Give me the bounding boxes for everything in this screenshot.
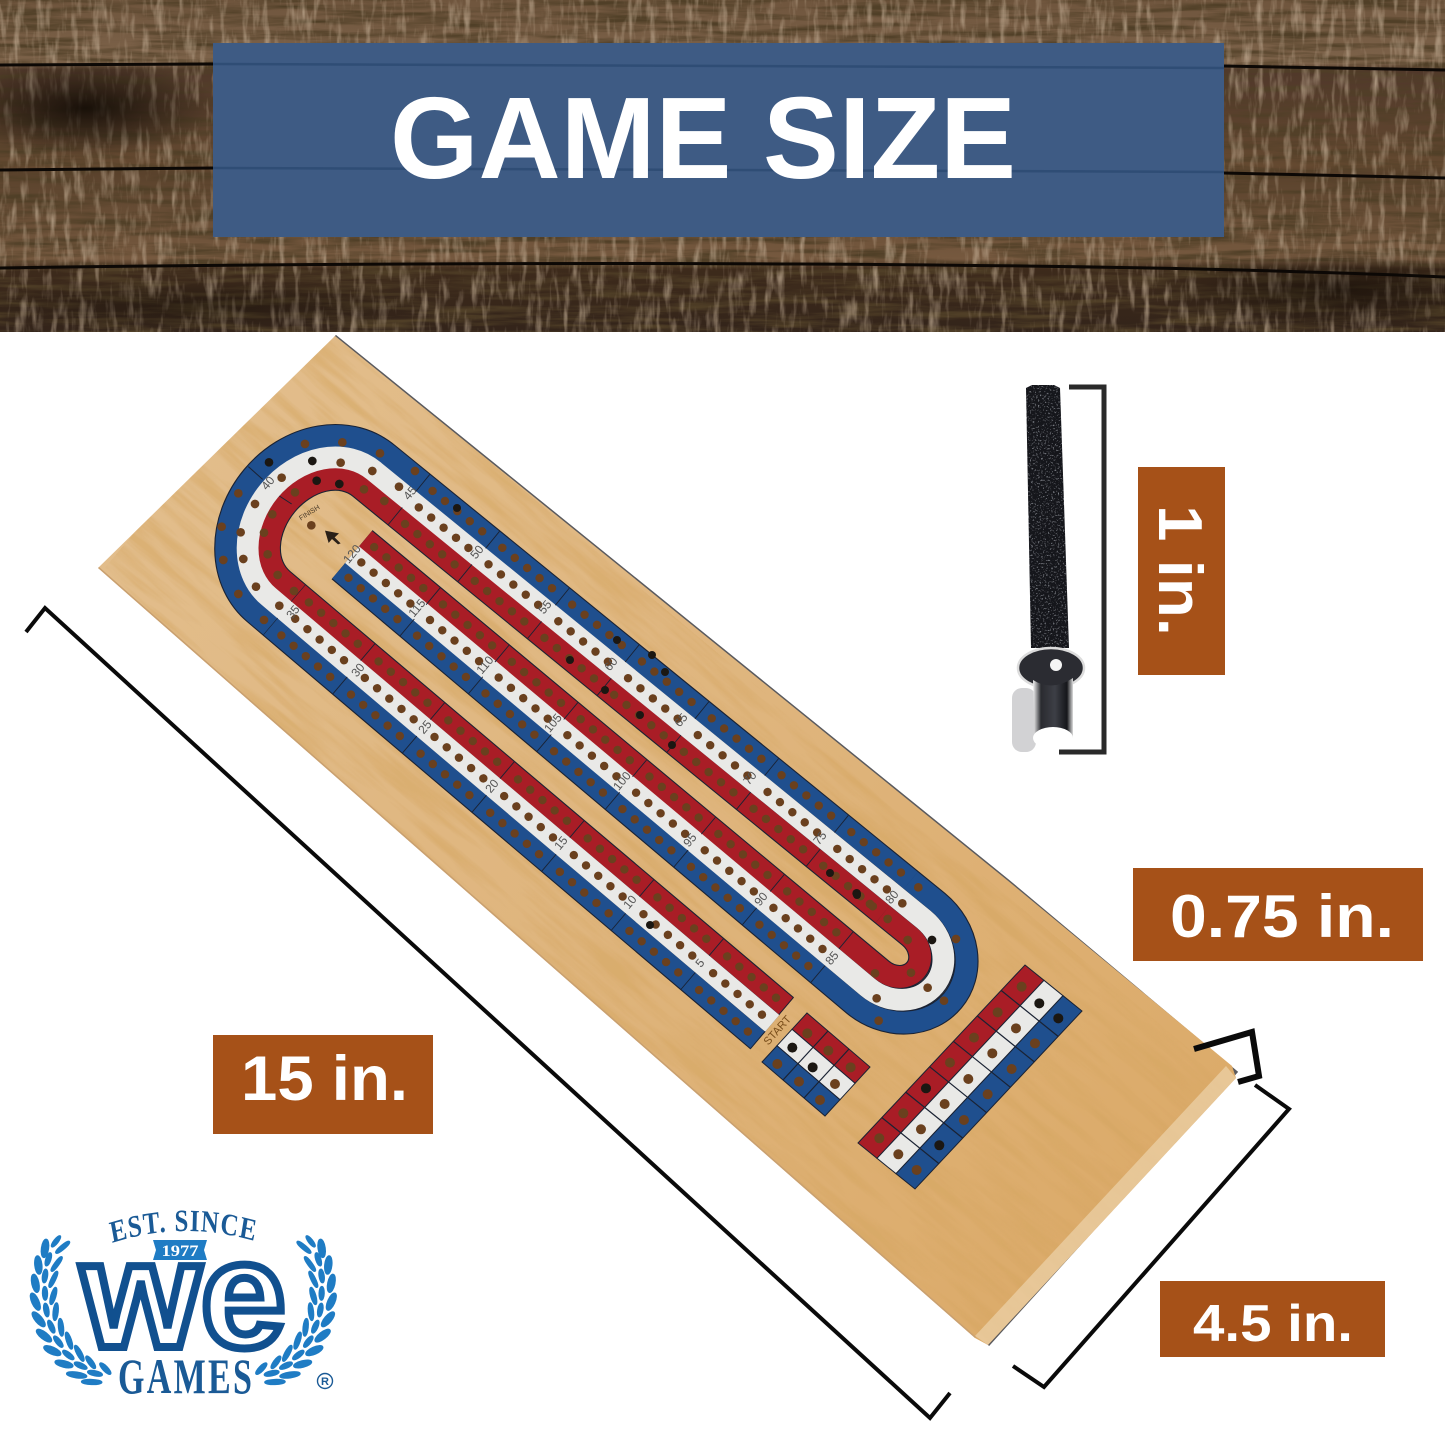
track numbers: 55	[535, 597, 555, 617]
track numbers: 30	[348, 660, 368, 680]
title banner	[213, 43, 1224, 237]
track numbers: 10	[620, 892, 640, 912]
logo	[30, 1209, 337, 1405]
track numbers: 20	[482, 776, 502, 796]
title text: GAME SIZE	[390, 73, 1016, 203]
length bracket	[26, 608, 950, 1418]
right arc holes	[852, 883, 960, 1025]
filled peg holes	[453, 504, 861, 929]
track numbers: 90	[751, 889, 771, 909]
label: 1 in.	[1138, 467, 1225, 675]
track numbers: START	[762, 1013, 794, 1048]
peg white tip	[1033, 727, 1073, 749]
cribbage board	[85, 316, 1240, 1364]
registered mark: R	[321, 1376, 329, 1388]
registered mark	[318, 1374, 332, 1388]
track numbers: 105	[541, 711, 565, 735]
est since	[108, 1210, 256, 1243]
track numbers: 70	[740, 768, 760, 788]
label: 15 in.	[213, 1035, 433, 1134]
game peg	[1012, 385, 1084, 752]
label: 4.5 in.: 4.5 in.	[1193, 1295, 1353, 1353]
track numbers: 100	[610, 769, 634, 793]
track numbers: 15	[551, 833, 571, 853]
header wood background	[0, 0, 1445, 332]
white track	[214, 422, 962, 1087]
track numbers: 75	[810, 828, 830, 848]
track numbers: 40	[258, 473, 278, 493]
label: 1 in.: 1 in.	[1145, 505, 1214, 636]
large end tray	[858, 965, 1082, 1189]
track numbers: 65	[671, 710, 691, 730]
small start tray	[762, 1013, 870, 1116]
thickness bracket	[1194, 1032, 1259, 1082]
board shadow edge	[335, 336, 1236, 1345]
track numbers: 5	[692, 956, 708, 970]
peg rod	[1026, 385, 1069, 648]
track numbers	[258, 473, 902, 1048]
blue track	[183, 391, 995, 1120]
track numbers: 80	[882, 887, 902, 907]
est since: EST. SINCE	[108, 1210, 256, 1243]
peg metal shank	[1033, 678, 1073, 745]
left arc holes	[217, 438, 419, 624]
track numbers: 25	[415, 717, 435, 737]
we mark: we	[80, 1209, 286, 1380]
track dividers	[267, 461, 911, 1050]
label: 0.75 in.: 0.75 in.	[1170, 883, 1394, 950]
peg shadow	[1012, 688, 1036, 752]
peg bracket	[1059, 387, 1104, 752]
track numbers: 85	[822, 948, 842, 968]
laurel right	[255, 1235, 338, 1385]
red track	[244, 452, 930, 1055]
label: 0.75 in.	[1133, 868, 1423, 961]
label: 4.5 in.	[1160, 1281, 1385, 1357]
peg metal dome	[1018, 648, 1084, 688]
track numbers: 115	[405, 596, 429, 620]
track numbers: FINISH	[298, 504, 321, 522]
logo: 1977	[162, 1243, 198, 1260]
laurel left	[29, 1235, 112, 1385]
track numbers: 110	[473, 653, 497, 677]
games: GAMES	[118, 1350, 252, 1405]
track outlines	[183, 391, 995, 1120]
track numbers: 60	[601, 654, 621, 674]
track bands	[183, 391, 995, 1120]
track numbers: 95	[680, 830, 700, 850]
track numbers: 35	[283, 602, 303, 622]
track numbers: 45	[400, 483, 420, 503]
peg holes on straights	[267, 461, 911, 1050]
track numbers: 120	[340, 542, 364, 566]
width bracket	[1013, 1085, 1289, 1387]
1977 ribbon	[153, 1240, 207, 1260]
wood surface	[85, 316, 1240, 1364]
track numbers: 50	[467, 542, 487, 562]
arrow	[325, 531, 341, 544]
label: 15 in.: 15 in.	[241, 1044, 408, 1114]
